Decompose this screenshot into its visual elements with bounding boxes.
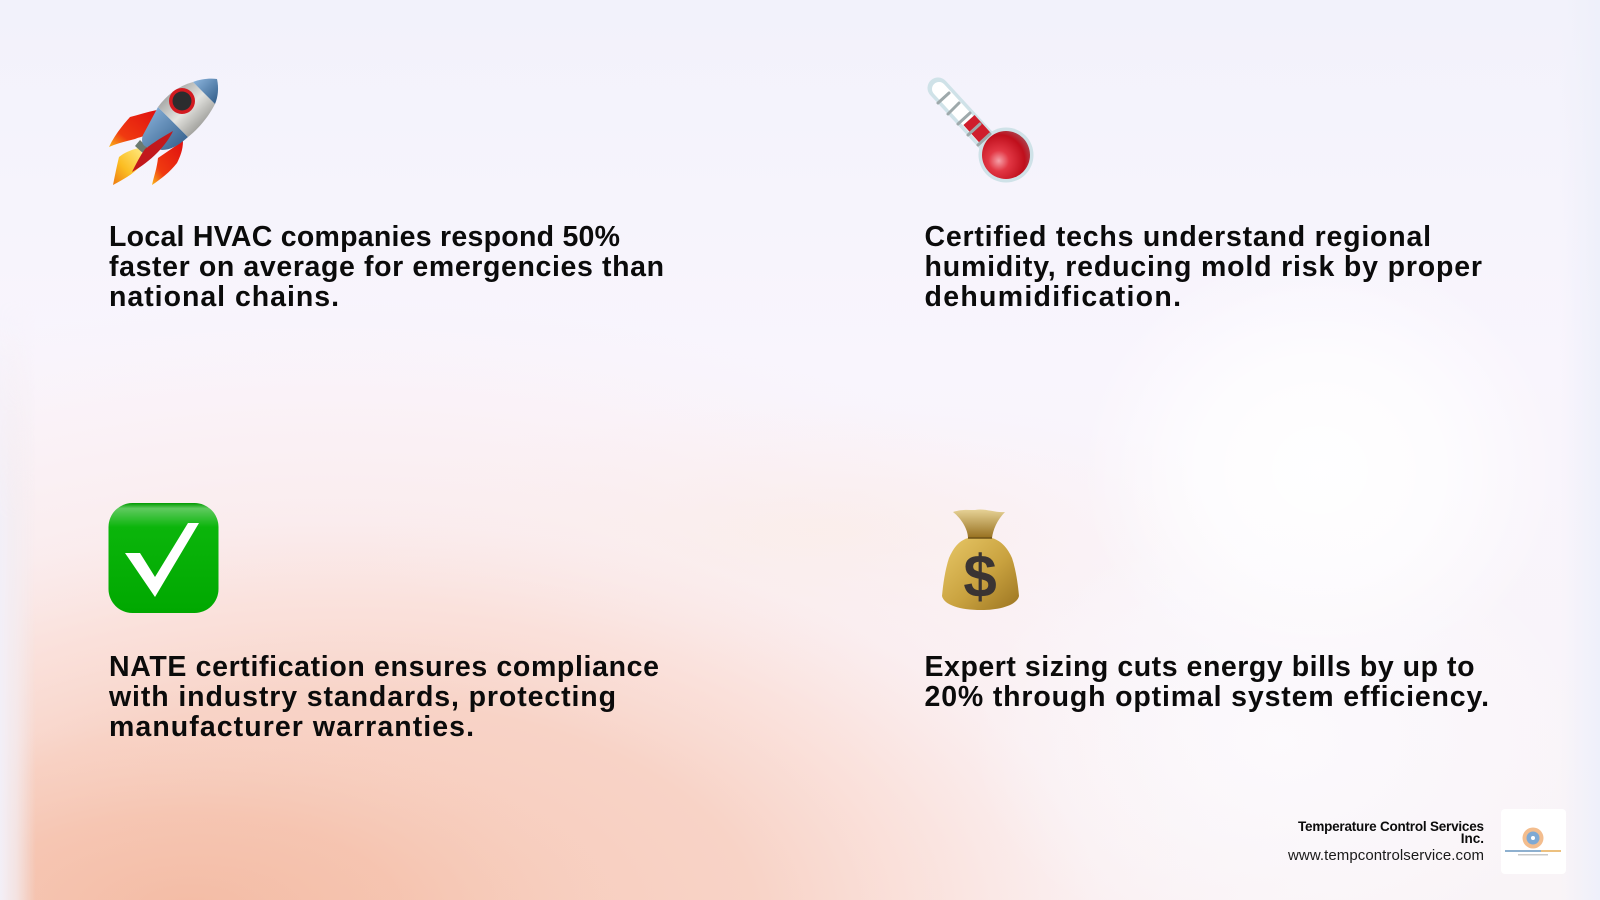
company name: Temperature Control Services	[1298, 819, 1484, 834]
icon: money bag	[942, 510, 1019, 610]
background gradient wash	[2, 352, 1448, 900]
statement: local response: faster on average for emergencies than	[109, 251, 664, 283]
statement: certified techs: humidity, reducing mold risk by proper	[924, 251, 1482, 283]
statement: NATE certification: manufacturer warranties.	[109, 711, 474, 743]
panel: energy savings	[924, 510, 1489, 713]
company name: Inc.	[1461, 831, 1484, 846]
icon: green check mark	[108, 503, 218, 613]
panel: certified techs	[924, 88, 1482, 313]
logo	[1501, 809, 1566, 874]
statement: energy savings: Expert sizing cuts energy bills by up to	[924, 651, 1474, 683]
statement: energy savings: 20% through optimal system efficiency.	[924, 681, 1489, 713]
icon: thermometer	[938, 88, 1034, 182]
footer: company branding	[1287, 809, 1566, 874]
panel: NATE certification	[108, 503, 659, 743]
panel: local response	[109, 79, 664, 313]
icon: rocket	[109, 79, 218, 185]
statement: certified techs: Certified techs understand regional	[924, 221, 1431, 253]
statement: NATE certification: with industry standards, protecting	[108, 681, 616, 713]
statement: certified techs: dehumidification.	[924, 281, 1181, 313]
website url: www.tempcontrolservice.com	[1287, 847, 1484, 864]
statement: local response: Local HVAC companies respond 50%	[109, 221, 620, 253]
icon: money bag: $	[963, 543, 997, 610]
statement: local response: national chains.	[109, 281, 339, 313]
statement: NATE certification: NATE certification ensures compliance	[109, 651, 659, 683]
